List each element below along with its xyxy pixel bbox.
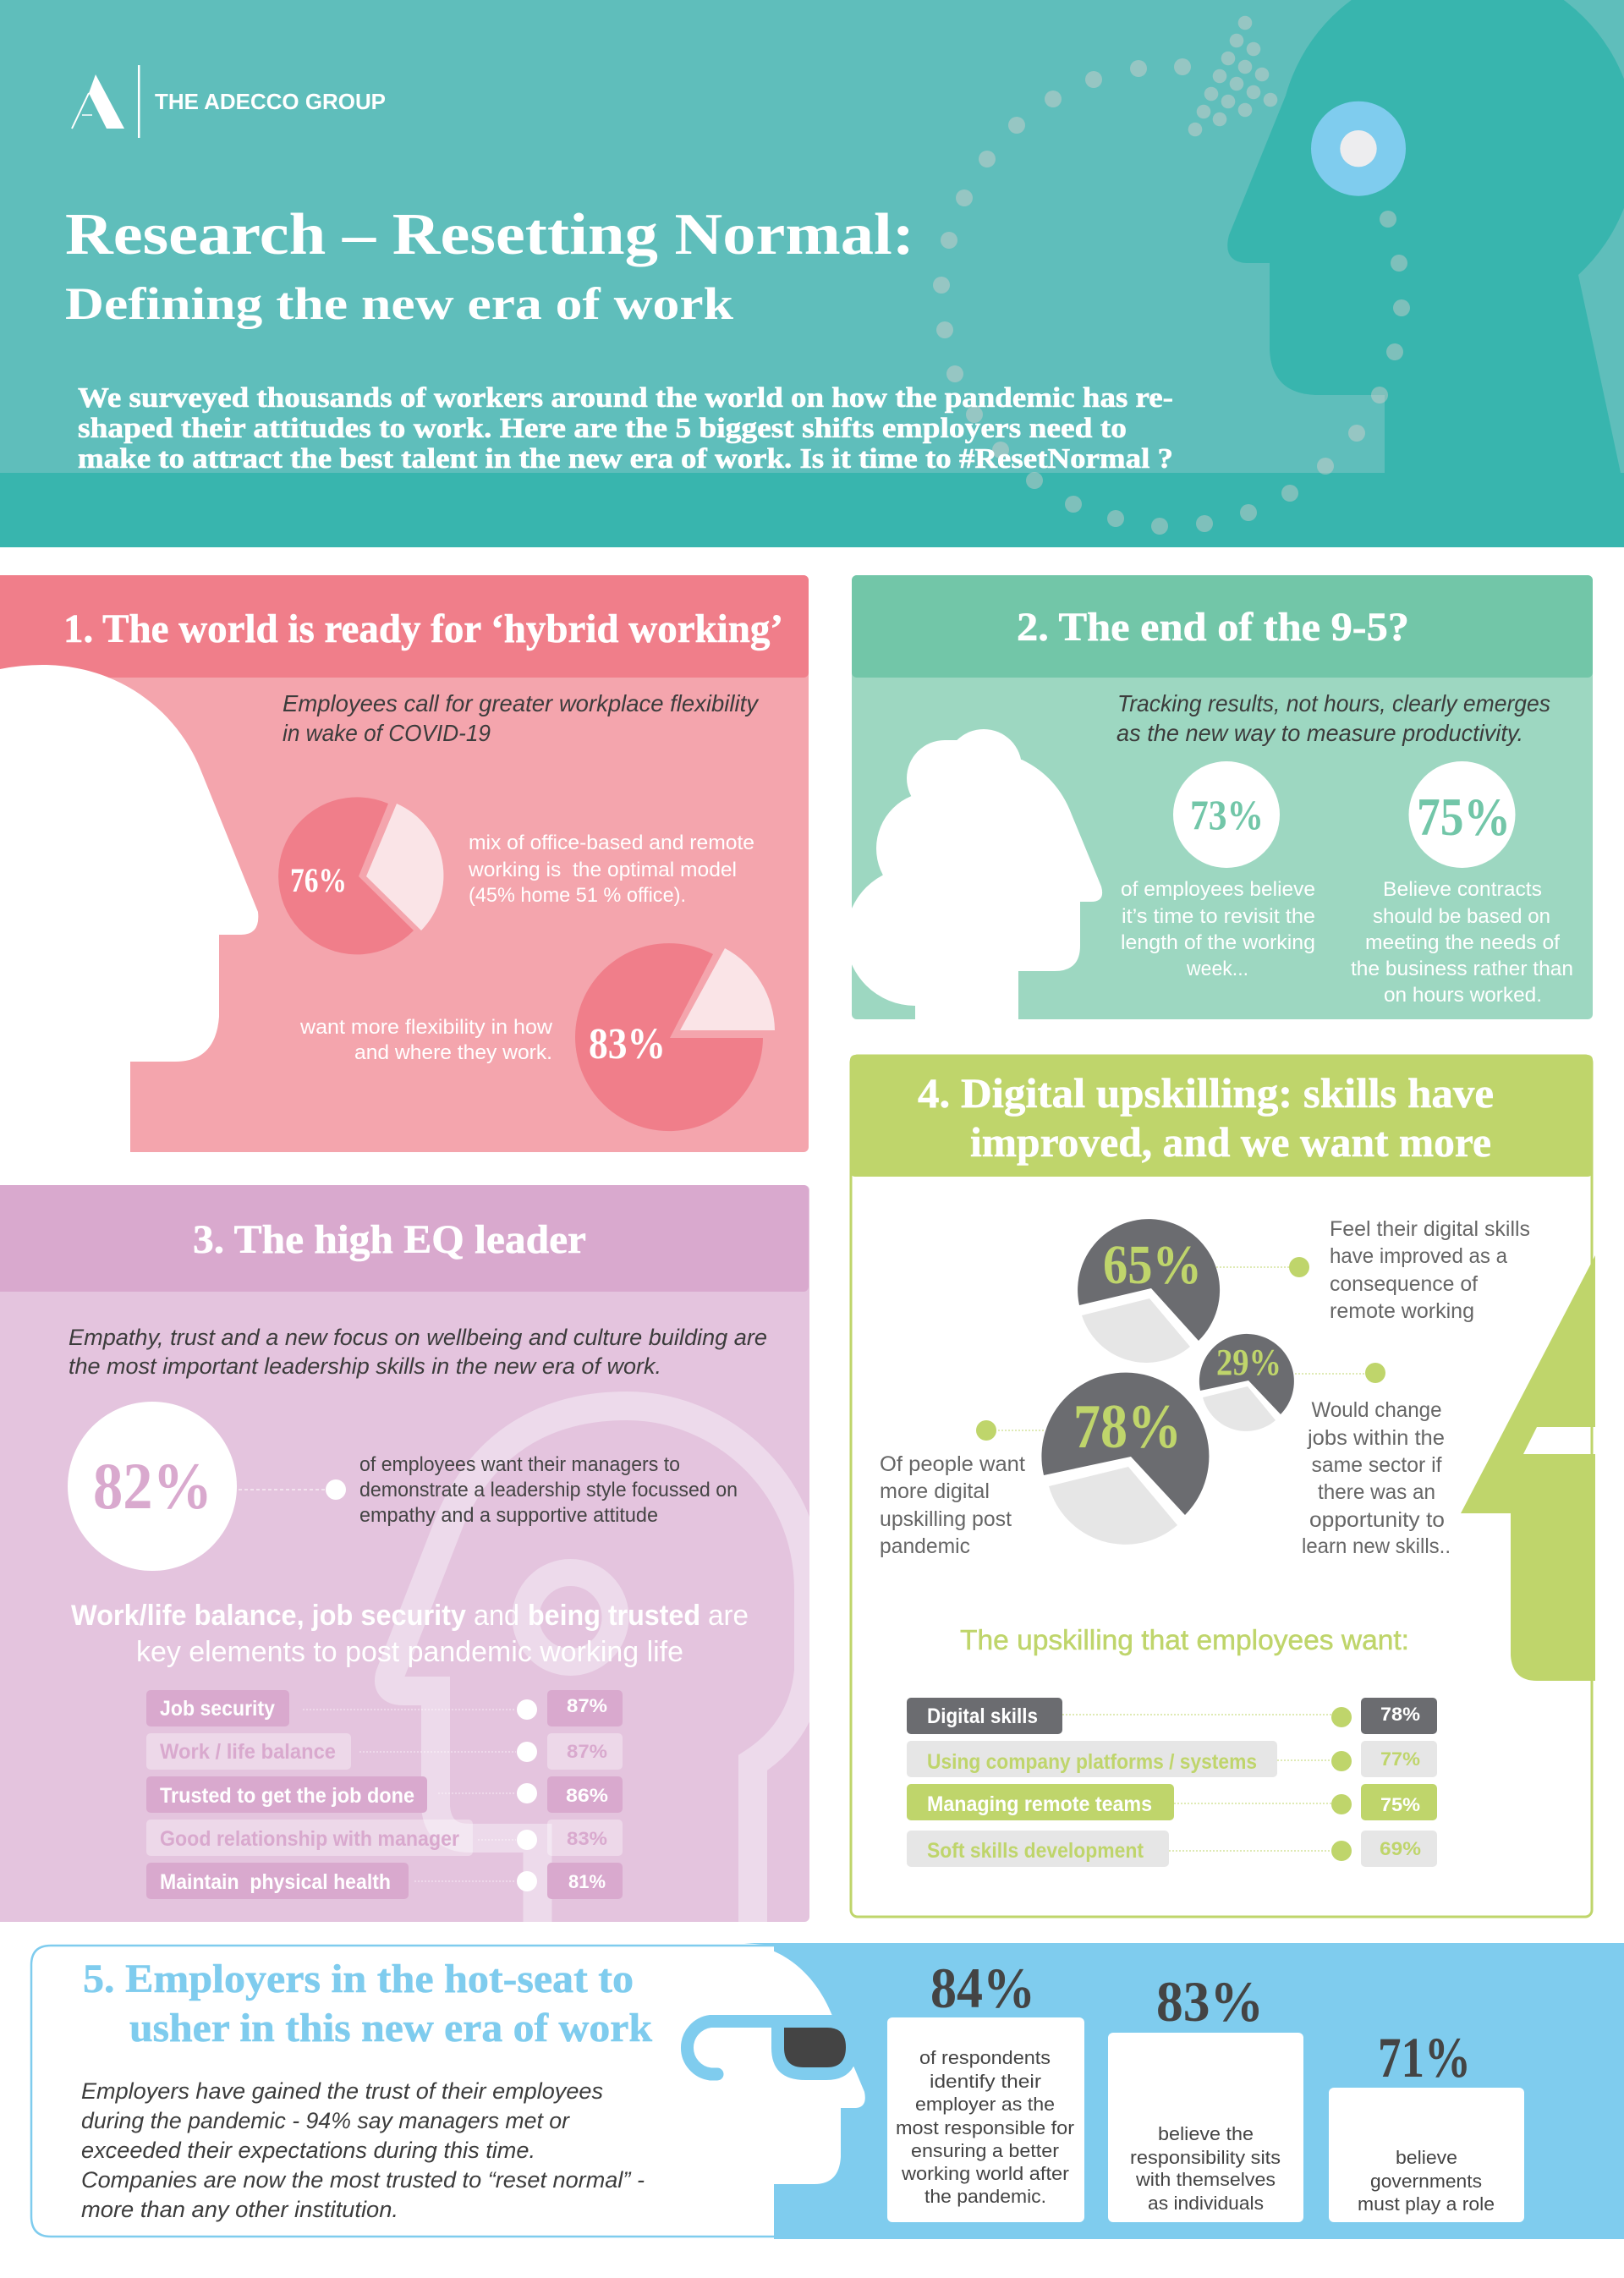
head silhouette with hair	[846, 729, 1102, 1019]
row: digital skills: 78%	[1380, 1704, 1420, 1725]
stat card 83%	[1108, 1969, 1303, 2222]
intro paragraph: shaped their attitudes to work. Here are the 5 biggest shifts employers need to	[78, 413, 1127, 444]
row: digital skills	[907, 1698, 1437, 1734]
caption 29%: jobs within the	[1307, 1426, 1445, 1450]
pie 76% caption	[468, 832, 754, 907]
pie 29%: 29%	[1216, 1342, 1281, 1383]
bottom band	[0, 473, 1624, 547]
row: physical health: 81%	[568, 1871, 606, 1892]
pie 29%	[1199, 1334, 1294, 1431]
caption 29%: learn new skills..	[1302, 1534, 1451, 1558]
stat card 83%: believe the	[1158, 2123, 1254, 2144]
pie 83%	[575, 943, 775, 1131]
key elements statement: Work/life balance, job security	[71, 1600, 466, 1632]
row: remote teams: 75%	[1380, 1794, 1420, 1815]
head silhouette	[0, 665, 258, 1154]
caption 29%	[1302, 1398, 1451, 1558]
pie 76% caption: mix of office-based and remote	[469, 832, 754, 854]
row: trusted	[146, 1776, 623, 1813]
stat 82%	[68, 1402, 237, 1571]
pie 78%: 78%	[1073, 1392, 1182, 1462]
stat 73% caption: week...	[1186, 958, 1248, 980]
stat card 84%: the pandemic.	[924, 2186, 1046, 2207]
row: soft skills: 69%	[1380, 1838, 1421, 1859]
caption 78%: pandemic	[880, 1534, 970, 1558]
panel 4 header	[850, 1055, 1593, 1177]
head silhouette	[34, 1946, 865, 2237]
title: Research – Resetting Normal:	[65, 202, 914, 267]
caption 78%: upskilling post	[880, 1507, 1012, 1531]
panel 5 body text: Employers have gained the trust of their employees	[81, 2078, 603, 2104]
stat 82%: 82%	[93, 1449, 212, 1523]
stat card 71%: believe	[1396, 2147, 1457, 2168]
panel 3 intro: Empathy, trust and a new focus on wellbeing and culture building are	[69, 1325, 767, 1350]
stat 73%	[1173, 761, 1280, 868]
key elements statement: being trusted	[528, 1600, 700, 1632]
stat card 83%: with themselves	[1135, 2169, 1276, 2190]
caption 29%: opportunity to	[1309, 1508, 1445, 1532]
caption 29%: there was an	[1318, 1480, 1435, 1504]
stat 73% caption: length of the working	[1121, 931, 1315, 954]
key elements statement	[71, 1600, 749, 1668]
row: work life balance: Work / life balance	[160, 1740, 336, 1764]
key elements statement: are	[708, 1600, 749, 1632]
key elements statement: key elements to post pandemic working life	[136, 1636, 683, 1668]
stat 75% caption: on hours worked.	[1384, 984, 1542, 1007]
stat card 84%: identify their	[930, 2071, 1041, 2092]
panel 3: high EQ leader	[0, 1185, 809, 1929]
pie 76% caption: working is the optimal model	[468, 859, 737, 881]
pie 83% caption: want more flexibility in how	[299, 1016, 553, 1039]
row: soft skills	[907, 1831, 1437, 1867]
row: company platforms: Using company platforms / systems	[927, 1750, 1257, 1774]
pie 76%: 76%	[290, 861, 347, 899]
caption 29%: Would change	[1311, 1398, 1441, 1422]
panel 1: hybrid working	[0, 575, 809, 1154]
pie 78%	[1041, 1373, 1209, 1545]
stat card 71%: must play a role	[1358, 2193, 1495, 2215]
panel outline	[31, 1946, 774, 2237]
panel 1 intro: in wake of COVID-19	[283, 720, 491, 746]
row: remote teams	[907, 1784, 1437, 1820]
panel 4: digital upskilling	[850, 1055, 1595, 1917]
panel 4 heading: improved, and we want more	[970, 1118, 1491, 1166]
caption 65%: remote working	[1330, 1299, 1474, 1323]
stat 75% caption: meeting the needs of	[1365, 931, 1560, 954]
pie 83% caption: and where they work.	[354, 1041, 552, 1064]
pie 76% caption: (45% home 51 % office).	[469, 884, 686, 907]
stat 73% caption	[1121, 878, 1315, 980]
stat card 71%	[1329, 2025, 1524, 2222]
panel 3 header	[0, 1185, 809, 1292]
stat card 84%: ensuring a better	[911, 2140, 1059, 2161]
panel 2 intro: Tracking results, not hours, clearly emerges	[1117, 690, 1550, 716]
row: soft skills: Soft skills development	[927, 1839, 1144, 1863]
panel 2 intro	[1116, 690, 1550, 746]
panel 3 intro	[69, 1325, 767, 1379]
pie 76%	[278, 797, 443, 954]
row: physical health: Maintain physical health	[160, 1870, 391, 1894]
row: digital skills: Digital skills	[927, 1704, 1038, 1728]
panel 5 heading	[83, 1957, 652, 2050]
stat 82% caption: of employees want their managers to	[359, 1453, 680, 1476]
caption 78%: Of people want	[880, 1452, 1025, 1476]
pie 65%: 65%	[1103, 1234, 1202, 1296]
head silhouette	[1461, 1255, 1595, 1681]
stat 73% caption: it’s time to revisit the	[1122, 905, 1315, 928]
row: good relationship: 83%	[567, 1828, 607, 1849]
panel 3 heading: 3. The high EQ leader	[193, 1217, 586, 1262]
caption 65%: consequence of	[1330, 1272, 1478, 1296]
spiral dots	[933, 16, 1410, 535]
stat card 84%: 84%	[930, 1956, 1035, 2020]
connector dot	[239, 1479, 346, 1500]
stat 75% caption: the business rather than	[1351, 958, 1573, 980]
caption 65%	[1330, 1217, 1530, 1323]
stat card 84%: most responsible for	[896, 2117, 1074, 2138]
stat 82% caption	[359, 1453, 738, 1527]
row: trusted: Trusted to get the job done	[160, 1784, 414, 1808]
pie 83% caption	[299, 1016, 553, 1064]
panel 3 intro: the most important leadership skills in the new era of work.	[69, 1353, 661, 1379]
row: company platforms: 77%	[1380, 1748, 1420, 1770]
panel 5 body text: Companies are now the most trusted to “reset normal” -	[81, 2167, 645, 2193]
panel 5 body text	[81, 2078, 645, 2222]
panel 1 heading: 1. The world is ready for ‘hybrid working’	[63, 607, 783, 651]
key elements statement: and	[474, 1600, 519, 1632]
header banner	[0, 0, 1624, 547]
caption 78%: more digital	[880, 1479, 990, 1503]
stat card 84%: working world after	[901, 2163, 1069, 2184]
panel 2 heading: 2. The end of the 9-5?	[1017, 605, 1409, 650]
panel 5 body text: more than any other institution.	[81, 2197, 398, 2222]
pie 83%: 83%	[589, 1020, 666, 1068]
panel 5 body text: during the pandemic - 94% say managers met or	[81, 2108, 570, 2133]
stat 75% caption: Believe contracts	[1383, 878, 1542, 901]
stat card 84%: employer as the	[915, 2094, 1055, 2115]
stat card 71%: 71%	[1378, 2025, 1471, 2089]
upskilling heading: The upskilling that employees want:	[960, 1624, 1409, 1655]
row: job security: Job security	[160, 1697, 275, 1721]
caption 65%: have improved as a	[1330, 1244, 1507, 1268]
stat 73% caption: of employees believe	[1121, 878, 1315, 901]
panel 1 header	[0, 575, 809, 678]
stat card 83%: 83%	[1156, 1969, 1264, 2034]
intro paragraph: make to attract the best talent in the new era of work. Is it time to #ResetNormal ?	[78, 443, 1173, 475]
stat 82% caption: demonstrate a leadership style focussed on	[359, 1479, 738, 1501]
row: job security: 87%	[567, 1695, 607, 1716]
stat 75%	[1409, 761, 1516, 868]
row: work life balance	[146, 1733, 623, 1770]
stat 82% caption: empathy and a supportive attitude	[359, 1504, 658, 1527]
panel 5: employers in the hot-seat	[31, 1943, 1624, 2239]
stat card 83%: responsibility sits	[1130, 2147, 1281, 2168]
stat card 83%: as individuals	[1148, 2193, 1264, 2214]
panel 1 intro: Employees call for greater workplace flexibility	[283, 690, 760, 716]
row: work life balance: 87%	[567, 1741, 607, 1762]
panel 2 header	[852, 575, 1593, 678]
logo	[72, 65, 386, 138]
head outline	[389, 1406, 809, 1929]
panel 4 heading	[918, 1069, 1494, 1166]
row: good relationship	[146, 1820, 623, 1856]
stat 75% caption	[1351, 878, 1573, 1007]
row: company platforms	[907, 1741, 1437, 1777]
row: remote teams: Managing remote teams	[927, 1792, 1152, 1816]
connector dots	[976, 1257, 1385, 1441]
panel 5 heading: 5. Employers in the hot-seat to	[83, 1957, 634, 2001]
pie 65%	[1078, 1219, 1220, 1363]
row: job security	[146, 1690, 623, 1726]
stat card 84%	[887, 1956, 1084, 2222]
icon: glasses	[687, 2022, 863, 2080]
eye	[1311, 102, 1406, 196]
row: trusted: 86%	[566, 1785, 608, 1806]
panel 4 heading: 4. Digital upskilling: skills have	[918, 1069, 1494, 1117]
stat 75% caption: should be based on	[1373, 905, 1550, 928]
caption 65%: Feel their digital skills	[1330, 1217, 1530, 1241]
stat 75%: 75%	[1417, 787, 1511, 847]
caption 29%: same sector if	[1311, 1453, 1442, 1477]
subtitle: Defining the new era of work	[65, 278, 733, 329]
caption 78%	[880, 1452, 1025, 1558]
upskilling list	[907, 1698, 1437, 1867]
stat card 71%: governments	[1370, 2171, 1482, 2192]
row: good relationship: Good relationship with manager	[160, 1827, 459, 1851]
panel 5 body text: exceeded their expectations during this time.	[81, 2138, 535, 2163]
intro paragraph: We surveyed thousands of workers around the world on how the pandemic has re-	[78, 382, 1173, 414]
panel 1 intro	[283, 690, 760, 746]
row: physical health	[146, 1863, 623, 1899]
panel 2 intro: as the new way to measure productivity.	[1116, 720, 1523, 746]
panel 2: end of 9-5	[846, 575, 1593, 1019]
stat card 84%: of respondents	[919, 2047, 1051, 2068]
stat 73%: 73%	[1190, 791, 1264, 838]
logo: THE ADECCO GROUP	[155, 89, 386, 114]
intro paragraph	[78, 382, 1173, 475]
head silhouette	[1227, 0, 1624, 473]
leadership skills list	[146, 1690, 623, 1899]
panel 5 heading: usher in this new era of work	[129, 2006, 652, 2050]
